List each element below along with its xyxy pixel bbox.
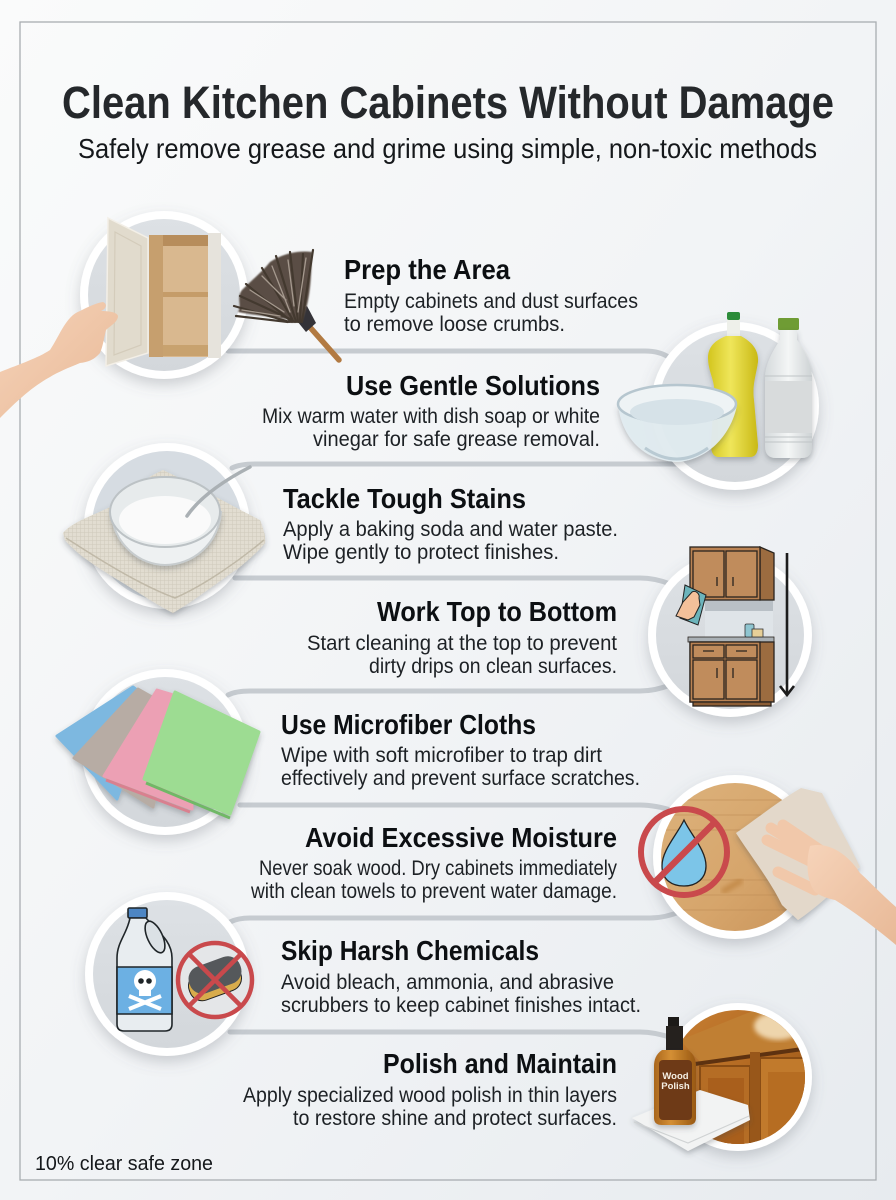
- connector lines: [228, 351, 682, 1038]
- description: [243, 1084, 617, 1130]
- description: Empty cabinets and dust surfaces: [344, 290, 638, 313]
- lower cabinet: [690, 642, 774, 706]
- icon: folded towel: [63, 470, 265, 613]
- description: [281, 971, 641, 1017]
- icon: white cloth: [632, 1090, 750, 1151]
- description: to restore shine and protect surfaces.: [293, 1107, 617, 1130]
- icon: wood polish bottle: Wood: [662, 1071, 689, 1082]
- description: Start cleaning at the top to prevent: [307, 632, 617, 655]
- image circle: wood surface: [653, 775, 817, 939]
- icon: stack of microfiber cloths: [57, 687, 259, 818]
- image circle: [85, 892, 249, 1056]
- description: dirty drips on clean surfaces.: [369, 655, 617, 678]
- description: Apply specialized wood polish in thin layers: [243, 1084, 617, 1107]
- footer note: 10% clear safe zone: [35, 1153, 213, 1175]
- icon: glass bowl of water: [618, 385, 737, 462]
- description: to remove loose crumbs.: [344, 313, 565, 336]
- description: Mix warm water with dish soap or white: [262, 405, 600, 428]
- description: Wipe with soft microfiber to trap dirt: [281, 744, 602, 767]
- icon: bleach jug with skull: [117, 908, 172, 1031]
- description: [250, 857, 617, 903]
- heading: Skip Harsh Chemicals: [281, 935, 539, 966]
- description: Never soak wood. Dry cabinets immediately: [259, 857, 617, 880]
- heading: Prep the Area: [344, 254, 511, 285]
- hand opening the door: [0, 302, 118, 418]
- icon: bowl of baking soda with spoon: [110, 467, 250, 565]
- heading: Use Microfiber Cloths: [281, 709, 536, 740]
- image circle: polished wood cabinet: [664, 1003, 812, 1157]
- subtitle: Safely remove grease and grime using simple, non-toxic methods: [78, 133, 817, 164]
- icon: no water sign: [641, 809, 727, 895]
- step 2: Use Gentle Solutions: [262, 312, 819, 490]
- upper cabinet: [690, 547, 774, 600]
- description: effectively and prevent surface scratches.: [281, 767, 640, 790]
- icon: feather duster: [234, 250, 339, 360]
- step 6: Avoid Excessive Moisture: [250, 775, 896, 945]
- description: [262, 405, 600, 451]
- image circle: soap, vinegar and bowl: [651, 312, 819, 490]
- icon: hand with cloth: [676, 585, 706, 625]
- heading: Polish and Maintain: [383, 1048, 617, 1079]
- description: [281, 744, 640, 790]
- description: [283, 518, 618, 564]
- image circle: open cabinet: [80, 211, 248, 379]
- heading: Avoid Excessive Moisture: [305, 822, 617, 853]
- step 1: Prep the Area: [0, 211, 638, 418]
- heading: Tackle Tough Stains: [283, 483, 526, 514]
- heading: Work Top to Bottom: [377, 596, 617, 627]
- description: with clean towels to prevent water damage.: [250, 880, 617, 903]
- image circle: [84, 443, 250, 609]
- icon: no abrasive sponge sign: [178, 943, 252, 1017]
- image circle: [82, 669, 248, 835]
- description: vinegar for safe grease removal.: [313, 428, 600, 451]
- description: Wipe gently to protect finishes.: [283, 541, 559, 564]
- step 8: Polish and Maintain: [243, 1003, 812, 1157]
- step 7: Skip Harsh Chemicals: [85, 892, 641, 1056]
- description: [307, 632, 617, 678]
- arrow: top to bottom: [780, 553, 794, 695]
- icon: wood polish bottle: Polish: [661, 1081, 690, 1092]
- description: Apply a baking soda and water paste.: [283, 518, 618, 541]
- step 3: Tackle Tough Stains: [63, 443, 618, 613]
- step 5: Use Microfiber Cloths: [57, 669, 640, 835]
- icon: wood polish bottle: [654, 1017, 696, 1125]
- image circle: kitchen cabinets: [648, 547, 812, 717]
- description: [344, 290, 638, 336]
- icon: towel and hand: [736, 788, 896, 945]
- step 4: Work Top to Bottom: [307, 547, 812, 717]
- description: scrubbers to keep cabinet finishes intact.: [281, 994, 641, 1017]
- description: Avoid bleach, ammonia, and abrasive: [281, 971, 614, 994]
- heading: Use Gentle Solutions: [346, 370, 600, 401]
